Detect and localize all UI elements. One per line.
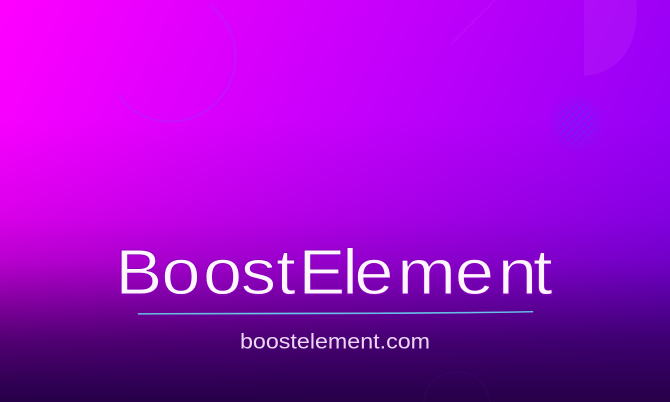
- domain name: boostelement.com: [240, 330, 430, 354]
- decorative circle outline: [118, 5, 235, 122]
- underline: [138, 311, 533, 314]
- brand name: BoostElement: [115, 237, 553, 308]
- decorative hatched circle: [551, 97, 602, 148]
- decorative dark circle outline: [424, 372, 490, 402]
- decorative diagonal line: [450, 0, 495, 45]
- decorative half circle: [584, 0, 637, 76]
